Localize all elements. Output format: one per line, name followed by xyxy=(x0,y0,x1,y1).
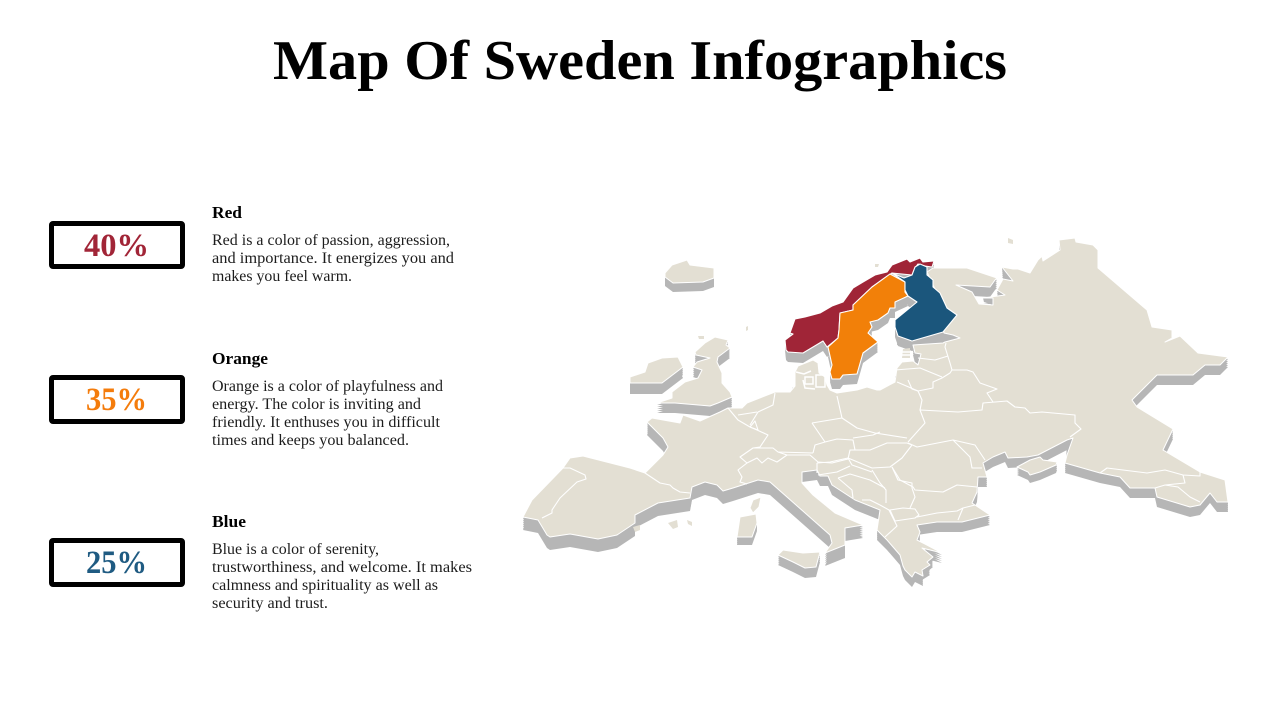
orange percentage box xyxy=(52,378,182,422)
orange description: friendly. It enthuses you in difficult xyxy=(212,414,441,431)
blue description xyxy=(212,541,472,612)
land masses xyxy=(523,238,1228,577)
Denmark and Estonian island gaps xyxy=(796,352,910,389)
region: Finland (blue) xyxy=(892,264,957,341)
blue percentage value: 25% xyxy=(86,545,147,581)
blue heading: Blue xyxy=(212,512,246,531)
panel: red legend item xyxy=(52,203,454,285)
red percentage box xyxy=(52,224,182,266)
blue percentage box xyxy=(52,540,182,584)
red description xyxy=(212,232,454,285)
map of Europe xyxy=(523,238,1228,590)
blue description: trustworthiness, and welcome. It makes xyxy=(212,559,472,576)
country borders xyxy=(542,343,1200,537)
orange description xyxy=(212,378,443,449)
orange description: energy. The color is inviting and xyxy=(212,396,421,413)
orange description: times and keeps you balanced. xyxy=(212,432,409,449)
panel: blue legend item xyxy=(52,512,472,612)
panel: orange legend item xyxy=(52,349,443,449)
blue description: calmness and spirituality as well as xyxy=(212,577,438,594)
red percentage value: 40% xyxy=(84,228,149,264)
title: Map Of Sweden Infographics xyxy=(273,30,1007,92)
orange heading: Orange xyxy=(212,349,268,368)
region: Sweden (orange) xyxy=(828,274,908,379)
region: Norway (red) xyxy=(785,258,934,353)
orange percentage value: 35% xyxy=(86,382,147,418)
map extruded shadow xyxy=(523,240,1228,590)
orange description: Orange is a color of playfulness and xyxy=(212,378,443,395)
blue description: Blue is a color of serenity, xyxy=(212,541,379,558)
red description: and importance. It energizes you and xyxy=(212,250,454,267)
red description: Red is a color of passion, aggression, xyxy=(212,232,450,249)
blue description: security and trust. xyxy=(212,595,328,612)
red description: makes you feel warm. xyxy=(212,268,352,285)
red heading: Red xyxy=(212,203,242,222)
